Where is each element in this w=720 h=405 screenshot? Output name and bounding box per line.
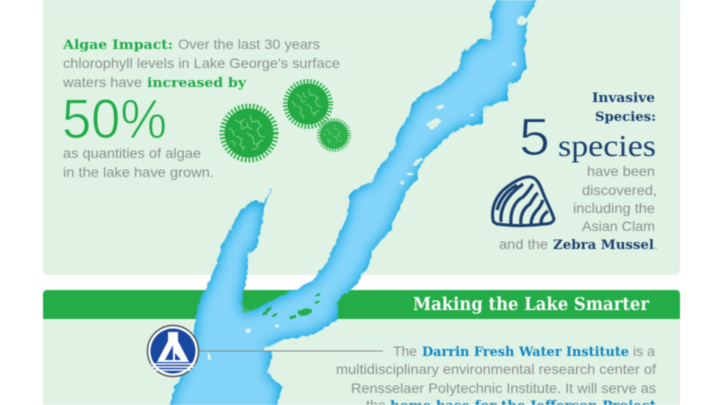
heading: Making the Lake Smarter: Making the Lake Smarter <box>413 295 650 315</box>
icon: large algae cell <box>223 107 275 159</box>
panel: Making the Lake Smarter body <box>43 319 680 405</box>
text: invasive species: Zebra Mussel <box>553 237 654 253</box>
text: Darrin Fresh Water Institute description <box>336 344 657 405</box>
text: algae impact: increased by <box>147 75 247 91</box>
text: invasive species: including the <box>573 201 655 216</box>
text: invasive species: and the <box>499 237 548 252</box>
text: algae impact: as quantities of algae <box>63 146 201 161</box>
text: invasive species: Species: <box>595 109 656 125</box>
text: invasive species: Asian Clam <box>582 219 655 234</box>
icon: algae cells <box>223 82 349 159</box>
text: algae impact: Over the last 30 years <box>178 37 320 52</box>
icon: zebra mussel shell <box>493 177 554 226</box>
stat: 5 species <box>519 108 656 167</box>
icon: small algae cell <box>319 120 349 150</box>
stat: 5 species: 5 <box>519 108 550 167</box>
text: Darrin Fresh Water Institute description: The <box>393 344 417 359</box>
islands: light islands in the lake <box>208 16 527 361</box>
text: algae impact: in the lake have grown. <box>63 165 214 180</box>
header bar: Making the Lake Smarter background <box>43 290 680 319</box>
icon: Darrin Fresh Water Institute logo <box>148 326 198 376</box>
text: invasive species: Invasive <box>592 90 655 106</box>
stat: 50%: 50% <box>62 87 167 150</box>
text: algae impact <box>62 37 340 180</box>
map: Lake George <box>165 0 548 405</box>
text: Darrin Fresh Water Institute description: multidisciplinary environmental research center of <box>336 362 656 377</box>
text: Darrin Fresh Water Institute description: Darrin Fresh Water Institute <box>422 344 629 360</box>
text: invasive species: have been <box>587 164 655 179</box>
text: Darrin Fresh Water Institute description: Rensselaer Polytechnic Institute. It will serve as <box>351 381 656 396</box>
text: algae impact: Algae Impact: <box>62 37 173 53</box>
text: invasive species <box>499 90 658 253</box>
stat: 5 species: species <box>558 128 656 163</box>
text: invasive species: . <box>654 237 658 252</box>
text: algae impact: chlorophyll levels in Lake George's surface <box>63 56 340 71</box>
icon: upper algae cell <box>286 82 330 126</box>
leader line: logo to institute text <box>198 350 383 352</box>
text: algae impact: waters have <box>62 75 142 90</box>
text: Darrin Fresh Water Institute description: is a <box>633 344 655 359</box>
panel: algae and invasive species <box>43 0 680 275</box>
islands: green islands in the lake <box>261 293 349 320</box>
text: invasive species: discovered, <box>582 183 657 198</box>
